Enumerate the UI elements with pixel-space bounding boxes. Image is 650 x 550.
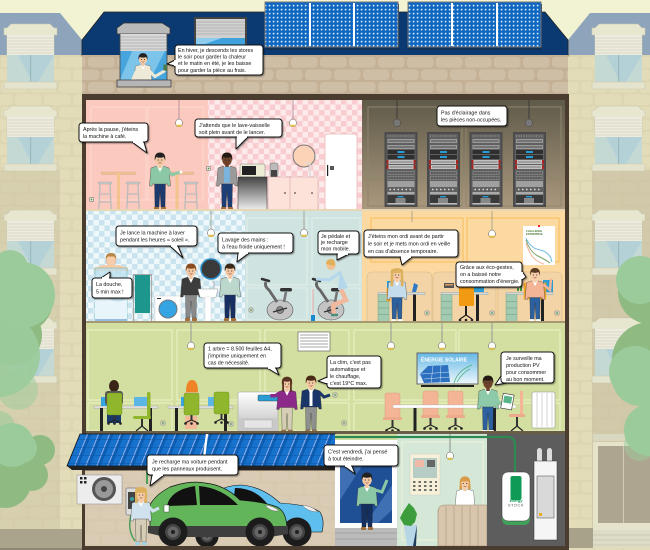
callout: charging phone: je recharge <box>320 240 348 246</box>
callout: washing hands <box>218 233 293 262</box>
callout: eco gestures: on a baissé notre <box>460 272 501 278</box>
poster: challenge: CHALLENGE <box>526 229 542 233</box>
round mirror <box>293 145 315 167</box>
battery storage unit <box>502 472 530 525</box>
hot water tank <box>534 448 557 540</box>
green cable to battery <box>335 437 515 472</box>
washing machine <box>155 296 181 322</box>
callout: PV monitoring: pour consommer <box>506 370 546 376</box>
callout: eco gestures <box>456 262 526 287</box>
building foot <box>82 546 568 550</box>
socket <box>161 421 165 425</box>
callout: eco gestures: Grâce aux éco-gestes, <box>460 265 514 271</box>
callout: PV monitoring: Je surveille ma <box>506 356 542 362</box>
callout: washing machine: Je lance la machine à laver <box>120 230 185 236</box>
brick wall <box>82 55 568 96</box>
man in navy jacket <box>300 376 337 433</box>
callout: coffee machine: la machine à café. <box>83 134 126 140</box>
oven <box>238 177 267 210</box>
panel: open-plan office <box>362 211 565 322</box>
panel: garage solar roof <box>67 434 336 470</box>
callout: air conditioning <box>318 356 381 388</box>
radiator <box>532 392 555 428</box>
callout: shower: La douche, <box>96 282 122 288</box>
callout: charging phone: mon mobile. <box>321 246 350 252</box>
callout: Friday <box>324 445 398 474</box>
man at window <box>131 53 167 80</box>
socket <box>229 422 233 426</box>
callout: car charging: Je recharge ma voiture pendant <box>152 460 228 466</box>
man in peach shirt <box>524 268 551 322</box>
roof window with shutter <box>194 17 247 55</box>
man with jacket <box>216 152 238 210</box>
pendant light <box>446 434 454 460</box>
callout: shutters: le soir pour garder la chaleur <box>178 54 246 60</box>
dormer window with man <box>116 22 172 88</box>
panel: solar panel right on roof <box>408 2 542 50</box>
towel rack <box>133 274 152 321</box>
panel: reception <box>397 434 487 546</box>
solar energy screen: ÉNERGIE SOLAIRE <box>421 356 468 364</box>
server racks <box>384 132 546 207</box>
callout: washing hands: Lavage des mains : <box>222 238 268 244</box>
sockets <box>425 311 559 315</box>
callout: car charging <box>147 455 238 486</box>
woman charging car <box>130 487 169 545</box>
bistro tables and stools <box>98 172 198 210</box>
tree: lower left <box>0 411 55 508</box>
callout: coffee machine <box>79 123 148 153</box>
roof <box>82 12 568 56</box>
panel: gym room <box>245 211 362 322</box>
callout: washing machine: pendant les heures « soleil ». <box>120 238 190 244</box>
callout: charging phone <box>318 231 359 260</box>
dim pendant lights <box>394 100 532 126</box>
photocopier <box>238 392 278 433</box>
pendant lights <box>188 323 496 350</box>
fridge <box>325 134 357 210</box>
floor divider <box>86 431 565 434</box>
callout: air conditioning: c'est 19°C max. <box>330 381 367 387</box>
callout: Friday: à tout éteindre. <box>328 456 364 462</box>
callout: dishwasher: soit plein avant de le lancer. <box>199 130 265 136</box>
woman in purple <box>270 377 297 433</box>
green car <box>148 482 288 546</box>
microwave and coffee machine <box>240 163 278 177</box>
man in mint sweater <box>220 264 240 321</box>
callout: PV monitoring: production PV <box>506 363 540 369</box>
panel: solar panel left on roof <box>265 2 399 50</box>
desk with seated woman <box>168 380 233 433</box>
exercise bike with rider <box>311 259 348 321</box>
pendant light <box>208 211 214 237</box>
socket <box>206 166 210 170</box>
pendant light <box>300 211 308 237</box>
round mirror <box>201 259 221 279</box>
meeting table and chairs <box>383 391 525 433</box>
tree: right <box>609 256 650 461</box>
callout: PV monitoring <box>495 352 554 385</box>
poster <box>410 454 440 495</box>
callout: shower <box>92 272 132 298</box>
callout: shower: 5 min max ! <box>96 290 124 296</box>
socket <box>90 198 94 202</box>
callout: lighting: Pas d'éclairage dans <box>441 110 491 116</box>
callout: dishwasher <box>195 119 282 149</box>
callout: printing: j'imprime uniquement en <box>207 354 266 360</box>
socket <box>249 308 253 312</box>
panel: entrance <box>335 434 397 546</box>
empty green chair <box>133 392 151 431</box>
man at entrance <box>356 472 387 530</box>
callout: PV monitoring: au bon moment. <box>506 377 545 383</box>
callout: eco gestures: consommation d'énergie. <box>460 279 520 285</box>
person in shower <box>94 253 128 271</box>
panel: right neighbouring building <box>568 13 650 550</box>
desks <box>378 280 553 322</box>
air conditioning unit <box>77 475 122 504</box>
callout: lighting: les pièces non-occupées. <box>441 118 501 124</box>
floor divider <box>86 321 565 323</box>
callout: air conditioning: automatique et <box>330 367 366 373</box>
workstation cubicles <box>367 272 562 322</box>
building interior frame <box>82 94 568 550</box>
woman with blonde hair <box>387 268 407 322</box>
man at table <box>150 152 182 210</box>
right wall edge <box>565 94 569 550</box>
desk with seated man <box>94 380 158 433</box>
shower cabin <box>95 268 127 321</box>
callout: shutters: En hiver, je descends les stores <box>178 48 253 54</box>
callout: dishwasher: J'attends que le lave-vaisselle <box>199 123 270 129</box>
callout: air conditioning: le chauffage, <box>330 374 361 380</box>
callout: charging phone: Je pédale et <box>321 234 351 240</box>
callout: computer off: en cas d'absence temporaire. <box>368 249 438 255</box>
pendant lights <box>176 100 296 127</box>
man in dark jacket <box>180 264 202 321</box>
callout: shutters <box>167 45 263 75</box>
man with tablet <box>478 376 514 433</box>
green cable and charger <box>126 468 147 541</box>
battery storage unit: Energy <box>510 499 523 503</box>
kitchen counter <box>268 163 318 210</box>
poster: challenge: ENTREPRISE <box>526 232 543 236</box>
orange chair <box>459 284 474 321</box>
callout: shutters: pour garder la pièce au frais. <box>178 68 246 74</box>
floor divider <box>86 209 565 211</box>
panel: bathroom <box>86 211 245 322</box>
callout: washing machine <box>116 226 197 258</box>
poster: challenge <box>523 225 555 265</box>
air conditioning vent <box>298 332 330 351</box>
panel: pink break room <box>86 100 362 210</box>
callout: shutters: et le matin en été, je les baisse <box>178 61 251 67</box>
callout: washing hands: à l'eau froide uniquement ! <box>222 244 285 250</box>
callout: printing <box>204 343 281 375</box>
panel: green office floor <box>86 323 565 433</box>
sink <box>198 282 218 322</box>
solar energy screen <box>417 353 478 387</box>
callout: computer off: le soir et je mets mon ordi en veille <box>368 242 450 248</box>
callout: printing: cas de nécessité. <box>208 360 249 366</box>
callout: Friday: C'est vendredi, j'ai pensé <box>328 450 387 456</box>
panel: technical room <box>487 434 565 546</box>
callout: lighting <box>437 106 507 126</box>
pendant lights <box>412 211 496 238</box>
callout: computer off <box>364 230 458 265</box>
callout: computer off: J'éteins mon ordi avant de partir <box>368 234 444 240</box>
callout: printing: 1 arbre = 8.500 feuilles A4, <box>208 346 272 352</box>
panel: garage <box>77 466 336 548</box>
callout: air conditioning: La clim, c'est pas <box>330 360 371 366</box>
reception desk <box>438 505 487 546</box>
exercise bike <box>262 279 293 320</box>
panel: dark server room <box>362 100 565 210</box>
plant <box>400 503 417 546</box>
battery storage unit: STOCK <box>508 502 524 508</box>
tree: upper left <box>0 250 55 410</box>
blue car <box>195 485 323 548</box>
socket <box>342 421 346 425</box>
callout: coffee machine: Après la pause, j'éteins <box>83 127 138 133</box>
callout: car charging: que les panneaux produisent. <box>152 466 222 472</box>
receptionist <box>455 476 475 531</box>
panel: left neighbouring building <box>0 13 82 550</box>
